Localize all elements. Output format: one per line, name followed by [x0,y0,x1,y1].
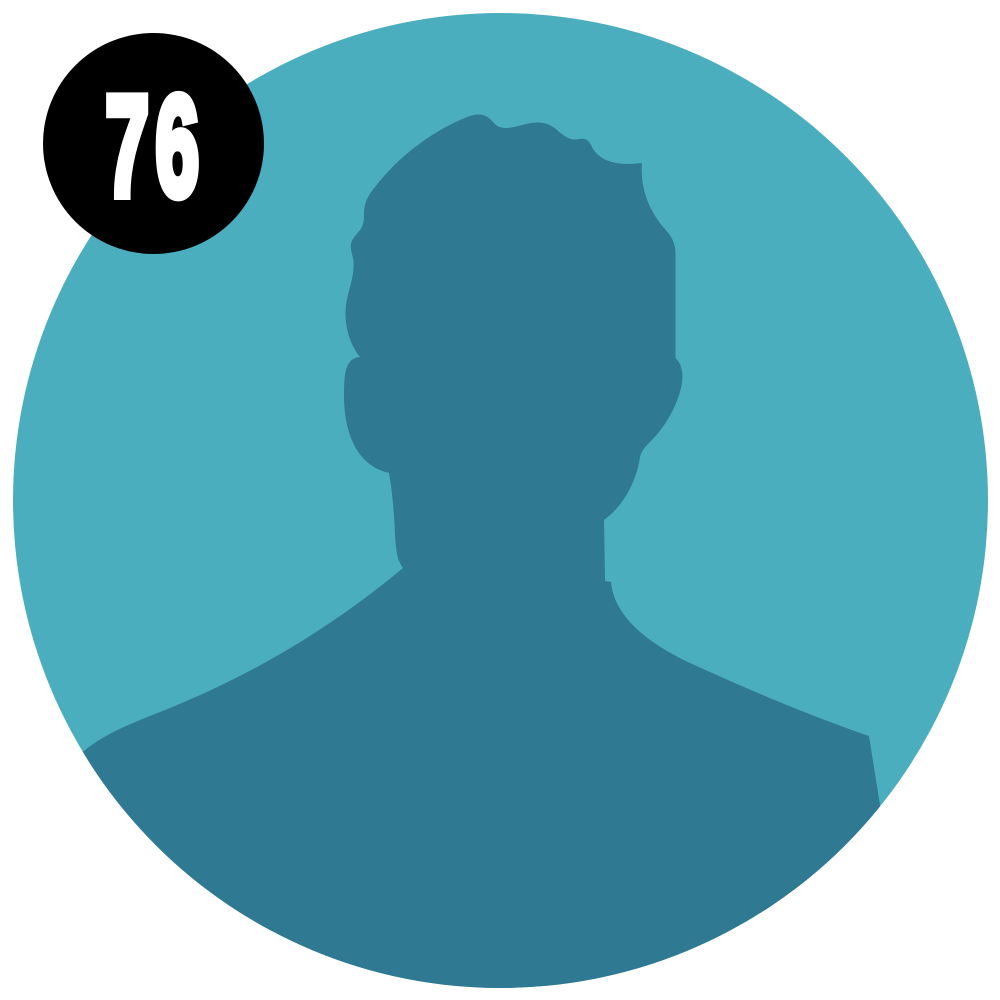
badge circle [43,33,264,254]
number badge [43,33,264,254]
badge number: 76 [106,67,199,226]
person silhouette [60,115,880,1000]
